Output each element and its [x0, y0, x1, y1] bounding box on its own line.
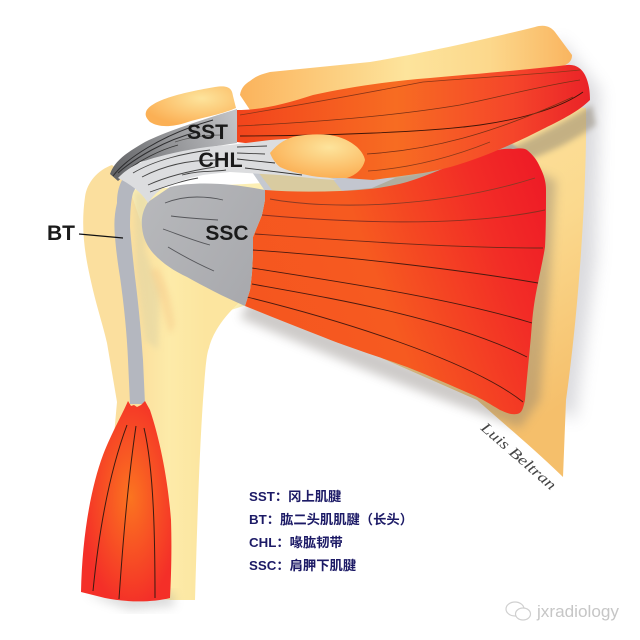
watermark — [506, 602, 620, 621]
subscapularis tendon — [142, 184, 265, 306]
humerus bone — [83, 165, 240, 600]
watermark text: jxradiology — [536, 602, 620, 621]
legend row: SST: SST：冈上肌腱 — [249, 489, 341, 504]
tan under ligament — [256, 172, 345, 192]
legend row: SSC: SSC：肩胛下肌腱 — [249, 557, 356, 573]
head shading — [134, 190, 160, 350]
supraspinatus muscle — [237, 65, 590, 180]
shadow under supraspinatus — [470, 105, 596, 165]
biceps muscle shadow — [86, 592, 175, 610]
glenoid pale region — [125, 183, 265, 400]
scapula bone — [240, 40, 600, 477]
subscapularis muscle shadow — [240, 170, 556, 428]
label: CHL: CHL — [198, 148, 243, 172]
label: BT with leader line: BT — [47, 222, 75, 245]
coracohumeral ligament — [118, 138, 337, 203]
legend row: CHL: CHL：喙肱韧带 — [249, 534, 343, 550]
blue-grey ligament lower strip — [332, 178, 395, 191]
supraspinatus tendon — [110, 109, 237, 181]
icon: chat bubbles — [506, 602, 530, 620]
grey gap between muscles — [335, 142, 520, 192]
label: SSC: SSC — [205, 222, 249, 245]
coracoid bone — [270, 134, 365, 178]
label: BT with leader line — [47, 222, 123, 245]
biceps muscle — [81, 401, 171, 601]
signature: Luis Beltran — [476, 419, 559, 494]
scapular spine bone — [240, 26, 572, 110]
subscapularis muscle — [245, 148, 546, 414]
acromion bone — [146, 86, 236, 126]
legend — [249, 489, 413, 573]
label: SST: SST — [187, 121, 228, 144]
legend row: BT: BT：肱二头肌肌腱（长头） — [249, 512, 413, 527]
blue-grey ligament strip — [252, 172, 272, 191]
biceps tendon — [114, 180, 145, 404]
orange streak — [150, 268, 175, 335]
